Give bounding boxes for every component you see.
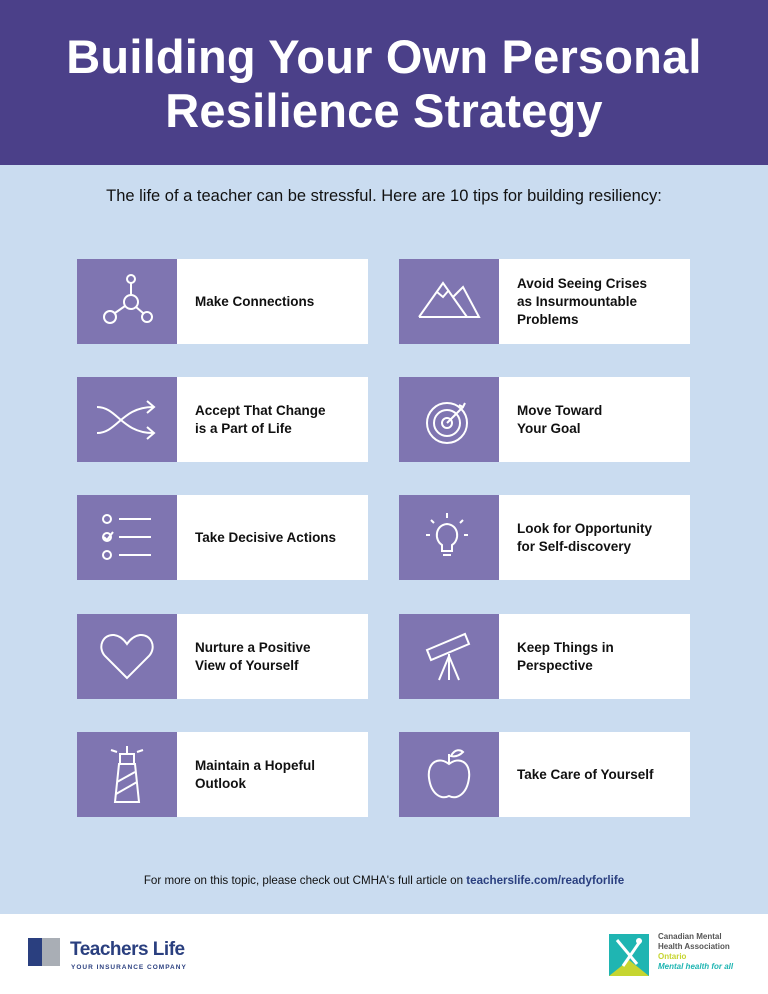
text (195, 640, 311, 672)
text: is a Part of Life (195, 420, 292, 436)
logo: CMHA: Mental health for all (658, 962, 733, 971)
logo: teachers life (28, 938, 187, 971)
text: Make Connections (195, 294, 314, 308)
card: positive view (77, 614, 368, 699)
icon: lighthouse (77, 732, 177, 817)
icon: checklist (77, 495, 177, 580)
text: Your Goal (517, 420, 581, 436)
text: Accept That Change (195, 402, 326, 418)
logo: CMHA (609, 932, 734, 976)
footer note: For more on this topic, please check out CMHA's full article on teacherslife.com/readyforlife (144, 874, 624, 887)
logo: CMHA: Ontario (658, 952, 686, 961)
icon: lightbulb (399, 495, 499, 580)
logo: CMHA: Canadian Mental (658, 932, 722, 941)
card: perspective (399, 614, 690, 699)
text: Look for Opportunity (517, 520, 652, 536)
card: accept change (77, 377, 368, 462)
icon: target (399, 377, 499, 462)
text: Problems (517, 312, 579, 326)
text: Maintain a Hopeful (195, 758, 315, 772)
title (0, 0, 768, 165)
text: View of Yourself (195, 658, 299, 672)
text: Take Care of Yourself (517, 766, 654, 782)
text: Keep Things in (517, 640, 614, 654)
card: make connections (77, 259, 368, 344)
card: self-discovery (399, 495, 690, 580)
text (517, 520, 652, 554)
icon: heart (77, 614, 177, 699)
logo: teachers life: YOUR INSURANCE COMPANY (71, 964, 187, 971)
card: goal (399, 377, 690, 462)
footer (0, 914, 768, 994)
title: Building Your Own Personal (66, 30, 702, 83)
text: Move Toward (517, 402, 602, 418)
text (517, 402, 602, 436)
text: Nurture a Positive (195, 640, 311, 654)
text: Outlook (195, 776, 246, 790)
text (517, 640, 614, 673)
text: as Insurmountable (517, 294, 637, 308)
card: self care (399, 732, 690, 817)
logo: teachers life: Teachers Life (70, 939, 185, 960)
text (195, 758, 315, 790)
card: avoid crises (399, 259, 690, 344)
icon: shuffle arrows (77, 377, 177, 462)
text (517, 276, 647, 326)
title: Resilience Strategy (165, 84, 603, 137)
text: Perspective (517, 658, 593, 672)
text (195, 402, 326, 436)
intro text: The life of a teacher can be stressful. Here are 10 tips for building resiliency: (106, 187, 662, 205)
icon: apple (399, 732, 499, 817)
text: Avoid Seeing Crises (517, 276, 647, 290)
card: decisive actions (77, 495, 368, 580)
icon: connections (77, 259, 177, 344)
logo: CMHA: Health Association (658, 942, 730, 951)
text: for Self-discovery (517, 538, 631, 554)
text: Take Decisive Actions (195, 530, 336, 544)
icon: telescope (399, 614, 499, 699)
card: hopeful outlook (77, 732, 368, 817)
icon: mountains (399, 259, 499, 344)
